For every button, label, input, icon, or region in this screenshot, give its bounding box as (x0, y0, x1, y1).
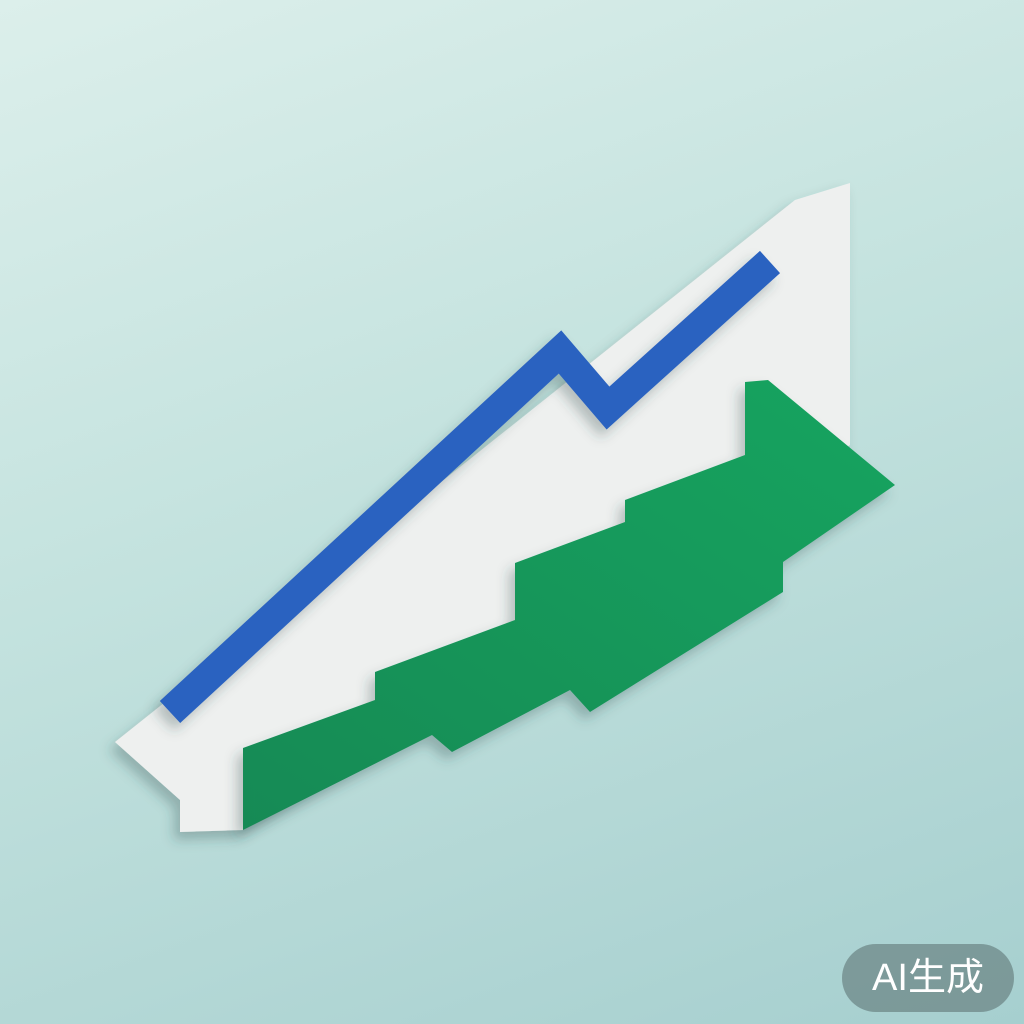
badge: AI generated: AI生成 (872, 957, 984, 999)
badge: AI generated (842, 944, 1014, 1012)
green stepped arrow (243, 380, 895, 830)
blue trend line (170, 262, 770, 712)
paper sheet (115, 183, 850, 832)
